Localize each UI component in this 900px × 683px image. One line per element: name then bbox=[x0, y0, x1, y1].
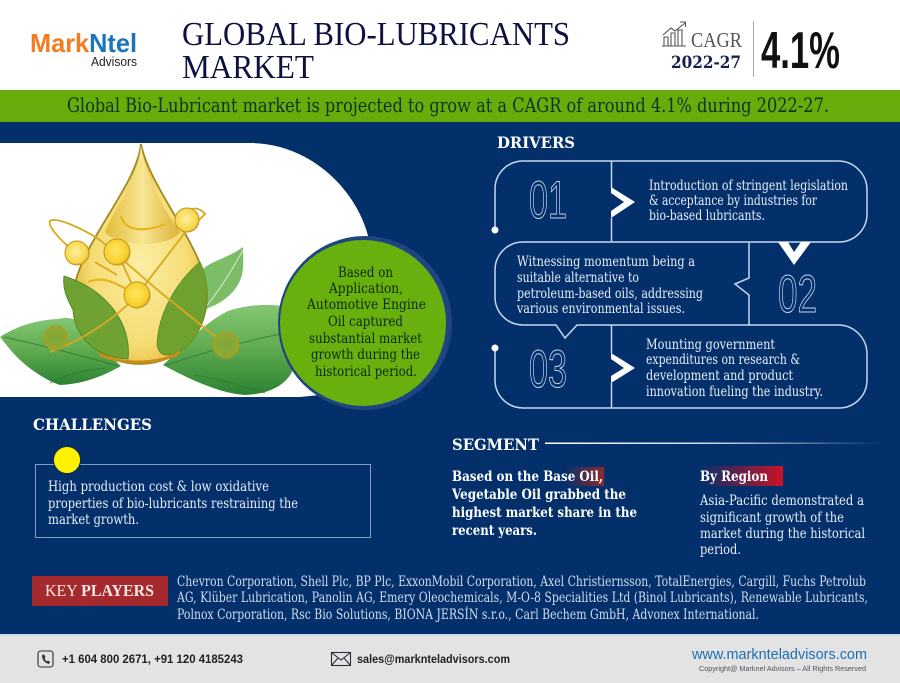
molecule balls bbox=[44, 208, 239, 358]
leaf inside drop right bbox=[157, 262, 207, 355]
driver 1 text: & acceptance by industries for bbox=[649, 193, 817, 209]
phone numbers: +1 604 800 2671, +91 120 4185243 bbox=[62, 654, 243, 666]
leaf bottom left bbox=[0, 318, 121, 385]
chevron 1 bbox=[611, 187, 635, 218]
callout: application circle: Application, bbox=[328, 281, 403, 297]
page background bbox=[0, 122, 900, 634]
icon: growth chart bbox=[662, 22, 686, 46]
callout: application circle: Based on bbox=[338, 265, 393, 281]
segment: base oil: Vegetable Oil grabbed the bbox=[451, 487, 626, 503]
driver 1 text bbox=[649, 178, 848, 224]
challenges text: market growth. bbox=[48, 512, 139, 528]
title bbox=[182, 16, 570, 86]
segment: by region: By Region bbox=[700, 469, 768, 485]
leaf bottom right bbox=[163, 305, 292, 395]
key players label bbox=[32, 576, 168, 606]
icon: yellow dot bbox=[54, 446, 80, 474]
panel: challenges bbox=[36, 446, 370, 538]
email: sales@marknteladvisors.com bbox=[357, 654, 510, 666]
callout: application circle bbox=[278, 236, 452, 410]
title: MARKET bbox=[182, 49, 314, 86]
heading: challenges: CHALLENGES bbox=[33, 415, 152, 434]
green banner bbox=[0, 90, 900, 122]
chevron 2 bbox=[778, 242, 811, 265]
years: 2022-27 bbox=[671, 53, 741, 73]
callout: application circle: growth during the bbox=[311, 347, 420, 363]
segment: by region: period. bbox=[700, 542, 741, 558]
leaf inside drop left bbox=[64, 276, 128, 359]
copyright: Copyright@ Marknel Advisors – All Rights Reserved bbox=[699, 666, 866, 673]
molecule orbit lines bbox=[50, 208, 226, 352]
callout: application circle: Automotive Engine bbox=[306, 297, 426, 313]
number 03: 03 bbox=[529, 340, 567, 399]
challenges text bbox=[48, 479, 298, 528]
drop bottom rim bbox=[100, 352, 180, 362]
logo: MarkNtel Advisors: Advisors bbox=[91, 54, 137, 69]
segment: base oil: Based on the Base Oil, bbox=[452, 469, 603, 485]
segment: by region: market during the historical bbox=[700, 526, 865, 542]
illustration: oil drop with leaves bbox=[0, 144, 292, 395]
CAGR value: 4.1% bbox=[761, 22, 840, 80]
segment: by region: significant growth of the bbox=[700, 510, 844, 526]
segment: by region bbox=[699, 466, 865, 558]
icon: mail bbox=[332, 652, 350, 666]
title: GLOBAL BIO-LUBRICANTS bbox=[182, 16, 570, 53]
number 02: 02 bbox=[778, 265, 817, 324]
key players list bbox=[176, 574, 868, 623]
segment: base oil: highest market share in the bbox=[452, 505, 637, 521]
header background bbox=[0, 0, 900, 90]
callout: application circle: substantial market bbox=[309, 331, 422, 347]
number 01: 01 bbox=[529, 171, 567, 230]
heading: segment: SEGMENT bbox=[452, 435, 539, 454]
segment: by region: Asia-Pacific demonstrated a bbox=[699, 493, 864, 509]
heading: drivers: DRIVERS bbox=[497, 133, 575, 152]
driver 2 text: suitable alternative to bbox=[517, 270, 639, 286]
chevron 3 bbox=[611, 353, 635, 383]
driver 3 text: Mounting government bbox=[646, 337, 775, 353]
driver 3 text: expenditures on research & bbox=[646, 352, 800, 368]
challenges text: High production cost & low oxidative bbox=[48, 479, 269, 495]
driver 1 text: Introduction of stringent legislation bbox=[649, 178, 848, 194]
driver 3 text: innovation fueling the industry. bbox=[646, 384, 823, 400]
driver 2 text: petroleum-based oils, addressing bbox=[517, 286, 703, 302]
driver 2 text bbox=[516, 254, 703, 317]
website: www.marknteladvisors.com bbox=[691, 646, 867, 663]
driver 3 text bbox=[646, 337, 823, 400]
driver 2 text: Witnessing momentum being a bbox=[517, 254, 695, 270]
panel: drivers flow bbox=[492, 161, 867, 408]
callout: application circle: Oil captured bbox=[328, 314, 403, 330]
leaf upper right bbox=[172, 247, 243, 345]
oil drop bbox=[73, 144, 207, 364]
segment: base oil bbox=[451, 467, 637, 539]
segment: base oil: recent years. bbox=[452, 523, 537, 539]
challenges text: properties of bio-lubricants restraining the bbox=[48, 496, 298, 512]
key players label: KEY PLAYERS bbox=[45, 581, 154, 600]
driver 2 text: various environmental issues. bbox=[516, 301, 685, 317]
CAGR block bbox=[662, 21, 840, 80]
icon: phone bbox=[38, 651, 53, 667]
logo: MarkNtel Advisors: MarkNtel bbox=[30, 28, 137, 58]
callout: application circle: historical period. bbox=[315, 364, 417, 380]
driver outline bbox=[495, 161, 867, 408]
driver 1 text: bio-based lubricants. bbox=[649, 208, 765, 224]
driver 3 text: development and product bbox=[646, 368, 793, 384]
CAGR label: CAGR bbox=[691, 28, 742, 52]
white image panel bbox=[0, 143, 369, 397]
footer bbox=[0, 634, 900, 683]
